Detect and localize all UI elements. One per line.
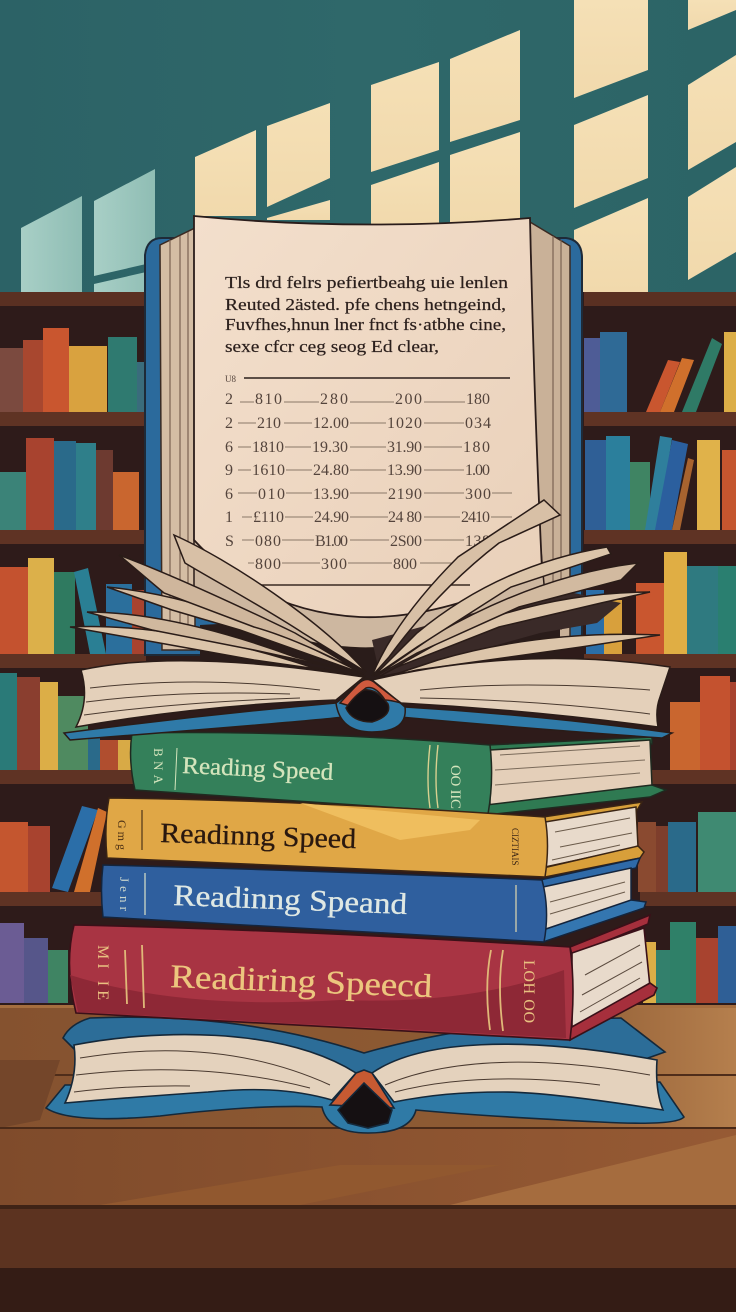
page table: 19.30 <box>312 439 348 456</box>
page text block: Fuvfhes,hnun lner fnct fs·atbhe cine, <box>225 315 506 334</box>
sunlit window panes <box>21 0 736 292</box>
page table: 2 <box>225 391 233 408</box>
dark gap below page <box>200 605 560 685</box>
page table: 9 <box>225 462 233 479</box>
page table: 200 <box>395 391 422 408</box>
page table: 010 <box>258 486 285 503</box>
bottom book left pages <box>65 1035 356 1103</box>
wooden table <box>0 1005 736 1312</box>
page text block: sexe cfcr ceg seog Ed clear, <box>225 337 439 356</box>
page table: 24.90 <box>314 509 349 526</box>
page text block: Tls drd felrs pefiertbeahg uie lenlen <box>225 273 509 292</box>
page table: 810 <box>255 391 282 408</box>
page table <box>225 374 512 585</box>
page table: 6 <box>225 486 233 503</box>
cover under pages <box>64 703 672 740</box>
bottom book spine <box>330 1070 394 1108</box>
fan pages right <box>390 634 660 676</box>
back book cover <box>145 238 582 655</box>
page table: 31.90 <box>387 439 422 456</box>
page table: 13.90 <box>387 462 422 479</box>
page table: 2190 <box>388 486 422 503</box>
main page <box>194 216 542 617</box>
page table: 080 <box>255 533 281 550</box>
page table: 1 <box>225 509 233 526</box>
page table: 280 <box>320 391 348 408</box>
tan band below page <box>194 540 545 648</box>
page table: 800 <box>255 556 281 573</box>
page table: 1020 <box>387 415 422 432</box>
page table: 800 <box>393 556 417 573</box>
spine of open book <box>336 678 405 732</box>
page table: 24.80 <box>313 462 349 479</box>
page edge blocks <box>160 228 195 650</box>
yellow book title: Readinng Speed <box>160 818 357 855</box>
red book <box>69 915 657 1040</box>
page table: 12.00 <box>313 415 349 432</box>
page table: 180 <box>463 439 490 456</box>
green book title: Reading Speed <box>182 753 334 786</box>
green book <box>131 732 666 815</box>
red book: LOH OO <box>520 960 537 1023</box>
dark shade under right fan <box>372 590 621 676</box>
bottom book back cover <box>63 1017 665 1075</box>
page table: 1610 <box>252 462 285 479</box>
bottom open book <box>46 1017 684 1133</box>
yellow book: CIZTIAIS <box>510 828 520 866</box>
page table: £110 <box>253 509 284 526</box>
fan pages left <box>70 626 366 676</box>
page table: 6 <box>225 439 233 456</box>
right pages block <box>372 659 670 727</box>
page text block <box>225 273 509 356</box>
bookshelf back and planks <box>0 292 736 1012</box>
page table: S <box>225 533 234 550</box>
page text block: Reuted 2ästed. pfe chens hetngeind, <box>225 295 506 314</box>
page table: 24 80 <box>388 509 422 526</box>
blue book: Jenr <box>117 877 132 912</box>
green book: BNA <box>151 748 166 785</box>
page table: 138 <box>465 533 490 550</box>
bottom book front cover <box>46 1082 684 1133</box>
page table: 210 <box>257 415 281 432</box>
red book title: Readiring Speecd <box>170 959 433 1005</box>
page table: 300 <box>321 556 347 573</box>
open book with fanned pages <box>64 500 672 740</box>
left pages block <box>76 661 364 727</box>
page table: 1.00 <box>465 462 490 479</box>
page table: 2 <box>225 415 233 432</box>
page table: 1810 <box>252 439 284 456</box>
green book: OO IIC <box>447 765 463 809</box>
page table: 2410 <box>461 509 490 526</box>
blue book title: Readinng Speand <box>173 879 408 921</box>
tall open book behind <box>145 216 582 685</box>
wall background <box>0 0 736 295</box>
page table: B1.00 <box>315 533 348 550</box>
shelf books left <box>0 328 146 1003</box>
page table: U8 <box>225 374 236 384</box>
page table: 13.90 <box>313 486 349 503</box>
page table: 300 <box>465 486 491 503</box>
red book: MI IE <box>94 945 111 1000</box>
shelf books right <box>584 332 736 1003</box>
page table: 180 <box>466 391 490 408</box>
yellow book <box>106 798 644 877</box>
page table: 2S00 <box>390 533 422 550</box>
yellow book: Gmg <box>115 820 129 850</box>
page table: 034 <box>465 415 491 432</box>
blue book <box>102 858 646 942</box>
bottom book right pages <box>372 1044 663 1110</box>
